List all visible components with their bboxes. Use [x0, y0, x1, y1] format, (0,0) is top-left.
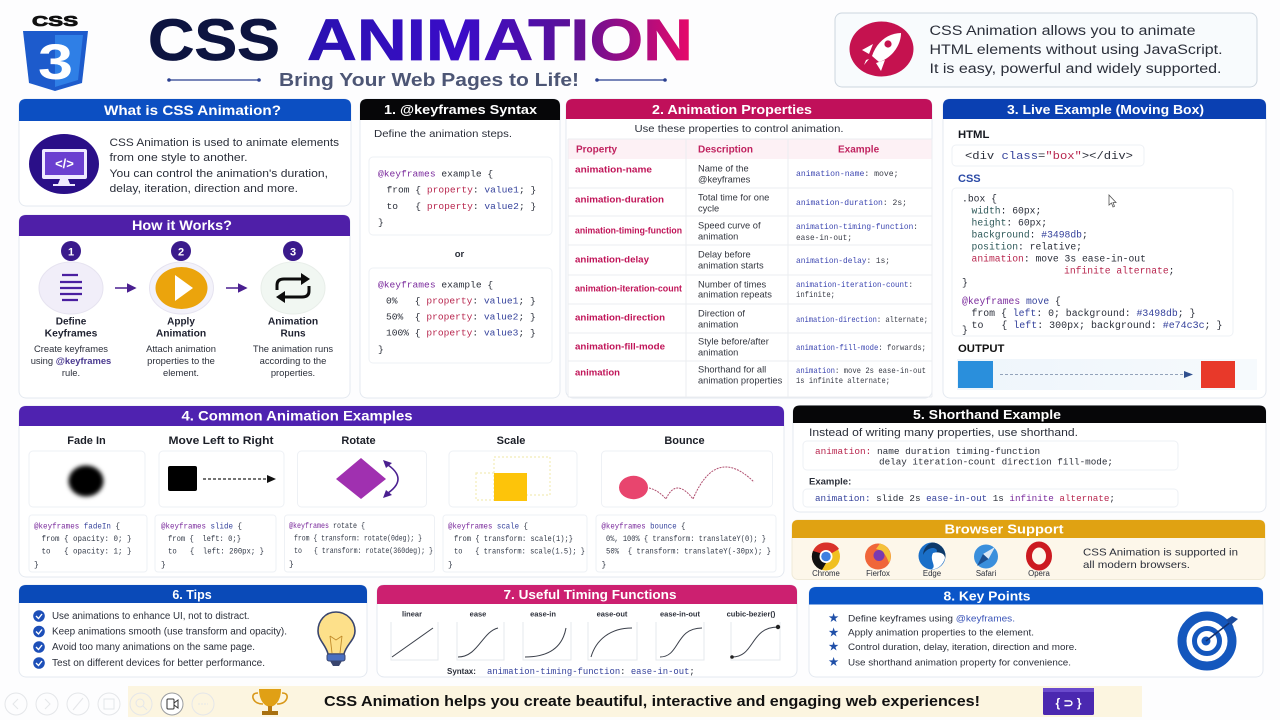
- table: animation-name: [575, 164, 652, 176]
- example: fade in: [29, 435, 147, 572]
- title: CSS: [148, 8, 280, 73]
- icon: safari: [974, 544, 998, 578]
- table: animation-fill-mode: forwards;: [796, 343, 926, 353]
- heading: What is CSS Animation?: [104, 103, 281, 118]
- panel: common animation examples: [19, 406, 784, 577]
- table: animation: [575, 368, 620, 378]
- icon: rocket: [850, 22, 914, 76]
- shorthand code: [803, 441, 1178, 470]
- table: animation: move 2s ease-in-out: [796, 366, 926, 376]
- step 1: Keyframes: [45, 328, 98, 340]
- step 2: Animation: [156, 328, 206, 340]
- step 2: element.: [163, 367, 199, 378]
- code block: percentages: 100% { property: value3; }: [386, 328, 536, 338]
- table: ease-in-out;: [796, 233, 852, 243]
- heading: Browser Support: [944, 522, 1064, 536]
- points list: ★: [828, 611, 839, 625]
- example: bounce: 0%, 100% { transform: translateY(0); }: [606, 535, 766, 544]
- syntax line: Syntax:: [447, 667, 476, 676]
- separator word: or: [455, 249, 465, 260]
- example: fade in: }: [34, 561, 39, 570]
- panel: browser support: [792, 520, 1265, 580]
- description: You can control the animation's duration,: [110, 168, 328, 180]
- chart: ease: [457, 610, 504, 660]
- step 3: [253, 241, 333, 378]
- icon: edge: Edge: [923, 569, 941, 578]
- table: cycle: [698, 204, 719, 214]
- example: rotate: from { transform: rotate(0deg); }: [294, 534, 422, 544]
- intro text: Instead of writing many properties, use shorthand.: [809, 427, 1078, 439]
- panel: keyframes syntax: [360, 99, 560, 398]
- message: CSS Animation helps you create beautiful, interactive and engaging web experiences!: [324, 694, 980, 710]
- icon: safari: Safari: [976, 569, 996, 578]
- example label: Example:: [809, 476, 851, 488]
- intro text: HTML elements without using JavaScript.: [930, 42, 1222, 57]
- toolbar: slideshow controls: [5, 693, 214, 715]
- icon: opera: [1028, 544, 1050, 578]
- table: animation-iteration-count: [575, 284, 683, 294]
- title: [148, 8, 693, 73]
- example: move left to right: from { left: 0;}: [168, 535, 241, 544]
- step 2: Apply: [167, 316, 195, 328]
- step 1: Create keyframes: [34, 343, 108, 354]
- footer banner: [128, 686, 1142, 717]
- step 3: The animation runs: [253, 343, 333, 354]
- step 3: Animation: [268, 316, 318, 328]
- CSS code: [952, 188, 1233, 336]
- heading: 6. Tips: [172, 588, 212, 602]
- CSS code: from { left: 0; background: #3498db; }: [972, 308, 1196, 319]
- table: Style before/after: [698, 336, 769, 346]
- table: 1s infinite alternate;: [796, 376, 890, 386]
- CSS code: to { left: 300px; background: #e74c3c; }: [972, 320, 1222, 331]
- chart: ease-in: [523, 610, 571, 660]
- CSS code: }: [962, 325, 968, 336]
- table: Delay before: [698, 250, 751, 260]
- table: animation properties: [698, 376, 783, 386]
- CSS code: @keyframes move {: [962, 296, 1061, 307]
- CSS code: infinite alternate;: [1064, 266, 1174, 276]
- panel: how it works: [19, 215, 350, 398]
- chart: linear: linear: [402, 610, 422, 618]
- shorthand code: animation:: [815, 446, 871, 457]
- output demo: [957, 359, 1257, 390]
- step 3: Runs: [280, 328, 306, 340]
- icon: code window: [1043, 688, 1094, 715]
- support text: [1083, 548, 1238, 571]
- intro text: Use these properties to control animation.: [634, 124, 844, 135]
- icon: edge: [918, 542, 946, 578]
- icon: CSS3 logo: 3: [38, 34, 73, 90]
- example: scale: [443, 435, 587, 572]
- table: Shorthand for all: [698, 364, 766, 374]
- table: animation starts: [698, 260, 764, 270]
- step 2: properties to the: [147, 355, 215, 366]
- points list: Apply animation properties to the element.: [848, 628, 1034, 638]
- arrow: [115, 287, 135, 289]
- panel: shorthand example: [793, 406, 1266, 512]
- icon: monitor code: [29, 134, 99, 194]
- table: @keyframes: [698, 174, 751, 184]
- code block: percentages: 50% { property: value2; }: [386, 312, 536, 322]
- example code: [803, 489, 1178, 507]
- chart: cubic-bezier: [727, 610, 780, 660]
- example: bounce: [596, 435, 776, 572]
- description: delay, iteration, direction and more.: [110, 183, 298, 195]
- example: bounce: Bounce: [664, 435, 705, 447]
- tips list: Keep animations smooth (use transform and opacity).: [52, 626, 287, 638]
- step 1: Define: [56, 316, 87, 328]
- table: Property: [576, 144, 618, 156]
- example: scale: to { transform: scale(1.5); }: [454, 548, 585, 556]
- code block: from to: from { property: value1; }: [386, 184, 536, 196]
- step 1: [31, 241, 111, 378]
- example: rotate: Rotate: [341, 435, 376, 447]
- heading: 8. Key Points: [944, 590, 1031, 604]
- table: animation-name: move;: [796, 169, 898, 179]
- table: animation-duration: 2s;: [796, 198, 907, 208]
- intro text: Define the animation steps.: [374, 129, 512, 140]
- step 2: [146, 241, 216, 378]
- CSS code: .box {: [962, 194, 997, 204]
- icon: mouse cursor: [1109, 195, 1116, 207]
- support text: all modern browsers.: [1083, 560, 1190, 571]
- intro text: [930, 23, 1222, 76]
- icon: light bulb: [318, 612, 355, 666]
- table: Direction of: [698, 308, 745, 318]
- description: CSS Animation is used to animate elements: [110, 137, 339, 149]
- code block: percentages: }: [378, 344, 384, 355]
- step 1: using @keyframes: [31, 355, 111, 366]
- chart: linear: [391, 610, 438, 660]
- table: animation-direction: alternate;: [796, 315, 928, 325]
- CSS code: animation: move 3s ease-in-out: [972, 254, 1146, 264]
- arrow: [226, 287, 246, 289]
- example: fade in: from { opacity: 0; }: [42, 535, 132, 544]
- panel: live example: [943, 99, 1266, 398]
- table: Total time for one: [698, 192, 769, 202]
- panel: key points: [809, 587, 1263, 677]
- CSS label: CSS: [958, 173, 981, 185]
- table: animation: [698, 232, 738, 242]
- points list: Use shorthand animation property for convenience.: [848, 658, 1071, 668]
- icon: firefox: [865, 544, 891, 578]
- points list: ★: [828, 640, 839, 654]
- example: move left to right: @keyframes slide {: [161, 522, 242, 532]
- icon: chrome: [812, 542, 840, 578]
- example: rotate: [284, 435, 434, 572]
- heading: 3. Live Example (Moving Box): [1007, 102, 1204, 117]
- table: animation-iteration-count:: [796, 280, 913, 290]
- table: animation-timing-function:: [796, 222, 918, 232]
- chart: ease-in: ease-in: [530, 610, 556, 618]
- example: move left to right: [155, 435, 284, 572]
- points list: [828, 611, 1077, 669]
- title: ANIMATION: [307, 8, 693, 73]
- icon: opera: Opera: [1028, 569, 1050, 578]
- support text: CSS Animation is supported in: [1083, 548, 1238, 558]
- syntax line: animation-timing-function: ease-in-out;: [487, 667, 695, 677]
- step 3: according to the: [260, 355, 326, 366]
- table: animation-fill-mode: [575, 342, 665, 352]
- example: bounce: }: [602, 561, 606, 570]
- points list: ★: [828, 655, 839, 669]
- CSS code: position: relative;: [972, 242, 1082, 252]
- example: bounce: @keyframes bounce {: [602, 522, 686, 532]
- code block: percentages: 0% { property: value1; }: [386, 296, 536, 306]
- example: scale: @keyframes scale {: [448, 522, 528, 532]
- points list: Define keyframes using @keyframes.: [848, 614, 1015, 624]
- description: [110, 137, 339, 195]
- step 3: 3: [290, 246, 296, 258]
- icon: firefox: Fierfox: [866, 569, 890, 578]
- shorthand code: delay iteration-count direction fill-mode;: [879, 456, 1113, 468]
- table: animation-duration: [575, 194, 664, 206]
- CSS code: background: #3498db;: [972, 230, 1088, 240]
- heading: 1. @keyframes Syntax: [384, 103, 537, 117]
- code block: from to: }: [378, 217, 384, 228]
- step 3: properties.: [271, 367, 315, 378]
- table: animation: [698, 320, 738, 330]
- icon: trophy: [253, 689, 287, 715]
- code block: from to: [369, 157, 552, 235]
- table: animation-delay: [575, 254, 650, 266]
- step 2: Attach animation: [146, 343, 216, 354]
- tips list: [33, 610, 287, 669]
- table: infinite;: [796, 290, 835, 300]
- icon: target: [1182, 616, 1238, 666]
- table: animation-timing-function: [575, 226, 682, 236]
- example: scale: }: [448, 561, 453, 570]
- example: rotate: to { transform: rotate(360deg); }: [294, 547, 433, 556]
- chart: ease-in-out: ease-in-out: [660, 610, 700, 618]
- heading: How it Works?: [132, 218, 232, 233]
- table: Description: [698, 144, 753, 156]
- example code: animation: slide 2s ease-in-out 1s infinite alternate;: [815, 493, 1115, 504]
- shorthand code: name duration timing-function: [877, 446, 1040, 457]
- table: Example: [838, 144, 880, 156]
- panel: timing functions: [377, 585, 797, 677]
- HTML label: HTML: [958, 129, 989, 141]
- header: [23, 8, 1257, 91]
- example: bounce: 50% { transform: translateY(-30px); }: [606, 548, 771, 556]
- table: Name of the: [698, 164, 749, 174]
- step 2: 2: [178, 246, 184, 258]
- subtitle: Bring Your Web Pages to Life!: [279, 70, 579, 90]
- code block: from to: @keyframes example {: [378, 168, 493, 180]
- step 1: 1: [68, 246, 74, 258]
- table: Number of times: [698, 280, 767, 290]
- points list: Control duration, delay, iteration, direction and more.: [848, 642, 1077, 653]
- code block: percentages: [369, 268, 552, 363]
- CSS code: width: 60px;: [972, 206, 1041, 216]
- tips list: Test on different devices for better performance.: [52, 658, 265, 669]
- heading: 5. Shorthand Example: [913, 408, 1061, 422]
- table: Speed curve of: [698, 220, 761, 230]
- heading: 2. Animation Properties: [652, 102, 812, 117]
- points list: ★: [828, 626, 839, 640]
- chart: ease-out: ease-out: [597, 610, 628, 618]
- example: rotate: @keyframes rotate {: [289, 522, 365, 531]
- example: fade in: @keyframes fadeIn {: [34, 522, 120, 532]
- panel: what is CSS animation: [19, 99, 351, 206]
- example: rotate: }: [289, 560, 294, 570]
- table: [568, 139, 932, 397]
- CSS code: height: 60px;: [972, 218, 1047, 228]
- chart: ease: ease: [470, 610, 486, 618]
- icon: code window: { ⊃ }: [1055, 696, 1082, 710]
- description: from one style to another.: [110, 152, 248, 164]
- example: move left to right: Move Left to Right: [168, 435, 274, 447]
- chart: ease-out: [588, 610, 637, 660]
- icon: chrome: Chrome: [812, 569, 840, 578]
- code block: percentages: @keyframes example {: [378, 280, 493, 290]
- table: animation-direction: [575, 312, 665, 324]
- example: fade in: Fade In: [67, 435, 106, 447]
- example: move left to right: }: [161, 561, 166, 570]
- HTML code: [952, 145, 1144, 166]
- subtitle: [167, 70, 667, 90]
- code block: from to: to { property: value2; }: [386, 201, 536, 212]
- example: move left to right: to { left: 200px; }: [168, 548, 264, 556]
- intro text: It is easy, powerful and widely supported.: [930, 61, 1222, 76]
- step 1: rule.: [62, 367, 80, 378]
- heading: 7. Useful Timing Functions: [504, 587, 676, 602]
- panel: tips: [19, 585, 367, 677]
- table: animation-delay: 1s;: [796, 256, 890, 266]
- callout: intro: [835, 13, 1257, 87]
- example: fade in: to { opacity: 1; }: [42, 548, 132, 556]
- panel: animation properties: [566, 99, 932, 398]
- tips list: Avoid too many animations on the same page.: [52, 642, 255, 653]
- tips list: Use animations to enhance UI, not to distract.: [52, 611, 250, 622]
- table: animation: [698, 348, 738, 358]
- example: scale: from { transform: scale(1);}: [454, 535, 573, 544]
- icon: CSS3 logo: CSS: [32, 13, 78, 30]
- intro text: CSS Animation allows you to animate: [930, 23, 1196, 38]
- CSS code: }: [962, 278, 968, 288]
- HTML code: <div class="box"></div>: [965, 151, 1133, 163]
- icon: CSS3 logo: [23, 13, 88, 91]
- example: scale: Scale: [497, 435, 525, 447]
- output label: OUTPUT: [958, 343, 1005, 355]
- chart: cubic-bezier: cubic-bezier(): [727, 610, 776, 618]
- icon: monitor code: </>: [55, 156, 74, 171]
- chart: ease-in-out: [656, 610, 704, 660]
- table: animation repeats: [698, 290, 772, 300]
- heading: 4. Common Animation Examples: [182, 408, 412, 424]
